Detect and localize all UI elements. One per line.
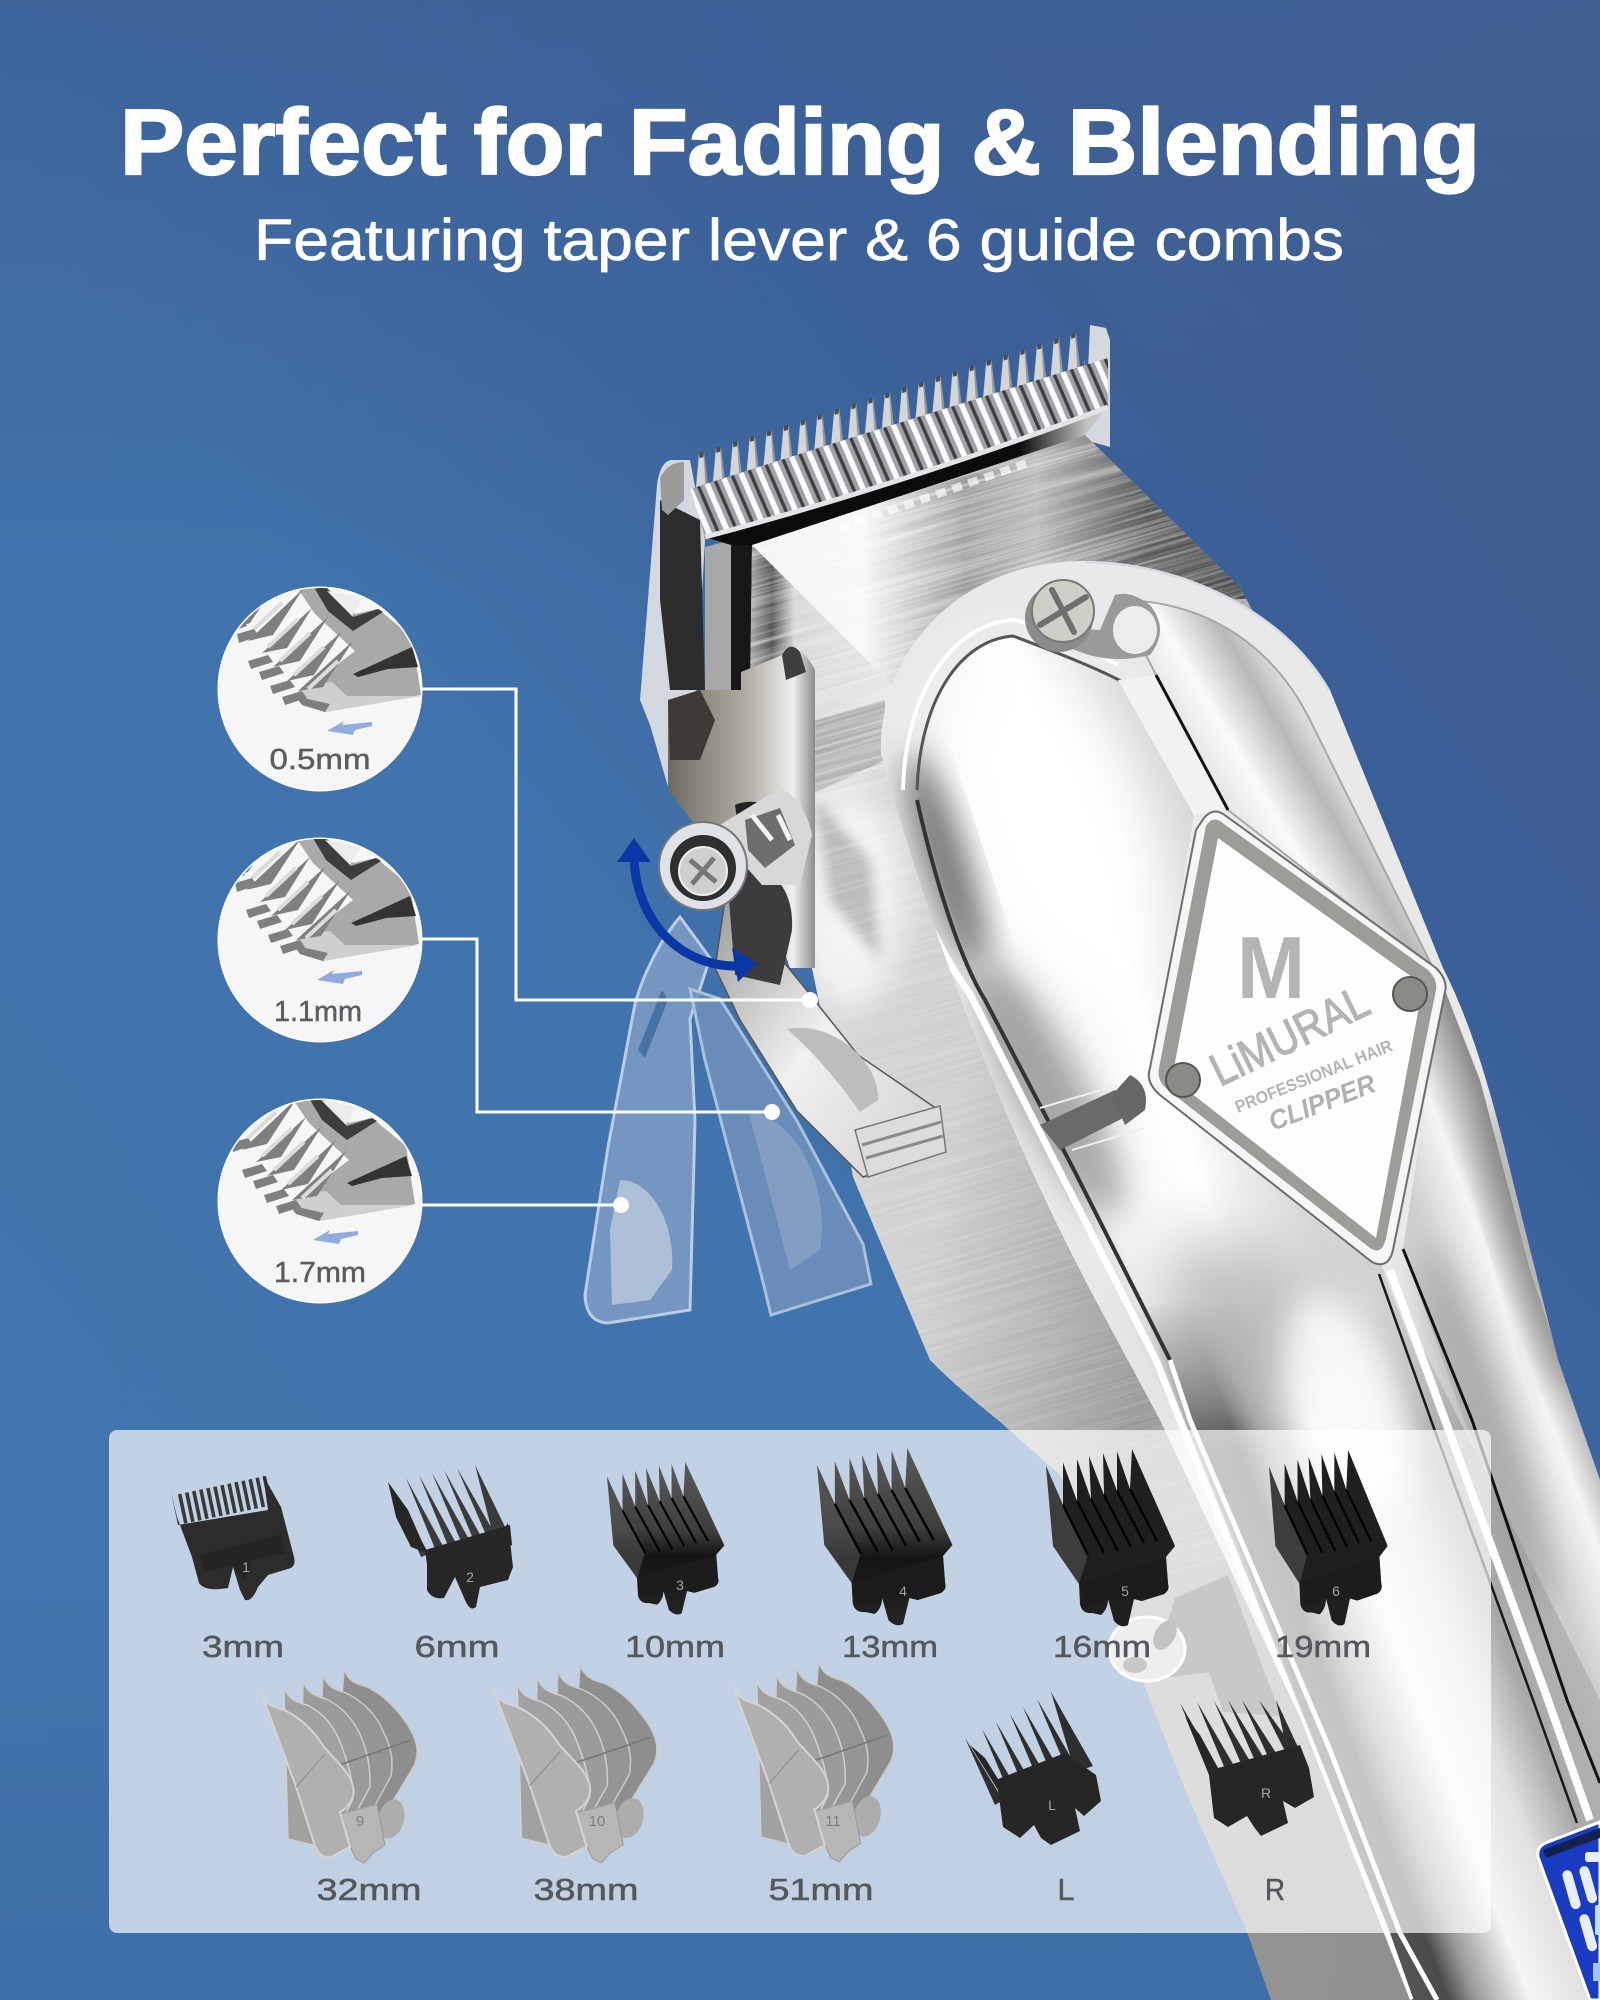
comb 51mm: [733, 1662, 894, 1907]
comb number: 5: [1121, 1583, 1129, 1599]
ghost taper lever positions: [585, 917, 871, 1323]
label 1.1mm: 1.1mm: [274, 996, 362, 1028]
clipper blade plate and guard: [640, 325, 1110, 800]
LCD display: [1538, 1822, 1600, 2000]
comb number: 6: [1332, 1583, 1340, 1599]
comb number: 3: [676, 1577, 684, 1593]
callout 1.7mm: [218, 1095, 629, 1303]
comb number: 1: [242, 1559, 250, 1575]
logo name: LiMURAL: [1202, 975, 1377, 1096]
comb 6mm: [388, 1465, 513, 1664]
blue rotation arrow: [617, 838, 757, 982]
title: Perfect for Fading & Blending: [120, 90, 1480, 194]
comb 19mm: [1269, 1450, 1388, 1664]
bolt: [1166, 1063, 1200, 1097]
logo mark: M: [1237, 918, 1305, 1017]
comb label: R: [1265, 1872, 1285, 1907]
comb R: [1180, 1700, 1314, 1907]
callout 1.1mm: [218, 835, 780, 1120]
taper lever: [659, 788, 946, 1177]
bolt: [1393, 977, 1427, 1011]
comb number: 11: [825, 1813, 841, 1830]
comb label: L: [1058, 1872, 1074, 1907]
comb 13mm: [817, 1448, 952, 1664]
top screw: [1025, 580, 1160, 659]
comb label: 16mm: [1053, 1629, 1151, 1664]
comb 3mm: [171, 1475, 295, 1664]
comb L: [965, 1692, 1101, 1907]
clipper teeth: [690, 332, 1108, 545]
subtitle: Featuring taper lever & 6 guide combs: [254, 208, 1344, 273]
logo product: CLIPPER: [1264, 1068, 1380, 1137]
comb number: L: [1048, 1797, 1056, 1813]
label 0.5mm: 0.5mm: [270, 744, 370, 776]
comb 10mm: [607, 1462, 725, 1664]
comb 32mm: [261, 1669, 422, 1907]
comb 16mm: [1046, 1449, 1175, 1664]
diamond badge: [1149, 811, 1446, 1264]
logo tagline: PROFESSIONAL HAIR: [1232, 1036, 1395, 1117]
comb label: 38mm: [534, 1872, 638, 1907]
comb label: 32mm: [316, 1872, 422, 1907]
comb label: 19mm: [1275, 1629, 1371, 1664]
comb 38mm: [493, 1665, 657, 1907]
mechanism bracket: [668, 647, 815, 968]
callout 0.5mm: [218, 586, 818, 1008]
comb label: 6mm: [414, 1629, 500, 1664]
comb label: 13mm: [842, 1629, 938, 1664]
comb number: 9: [356, 1813, 364, 1830]
chrome handle: [860, 550, 1600, 2000]
clipper hanger bracket: [1109, 1575, 1281, 1716]
comb panel: [109, 1430, 1491, 1933]
comb label: 10mm: [625, 1629, 725, 1664]
comb number: 4: [899, 1583, 907, 1599]
comb number: R: [1261, 1785, 1271, 1801]
comb label: 3mm: [202, 1629, 284, 1664]
comb number: 10: [589, 1813, 605, 1830]
comb label: 51mm: [768, 1872, 874, 1907]
clipper brushed body: [750, 435, 1410, 2000]
adjustment ring and screw: [659, 788, 812, 910]
comb number: 2: [466, 1569, 474, 1585]
label 1.7mm: 1.7mm: [274, 1257, 366, 1289]
